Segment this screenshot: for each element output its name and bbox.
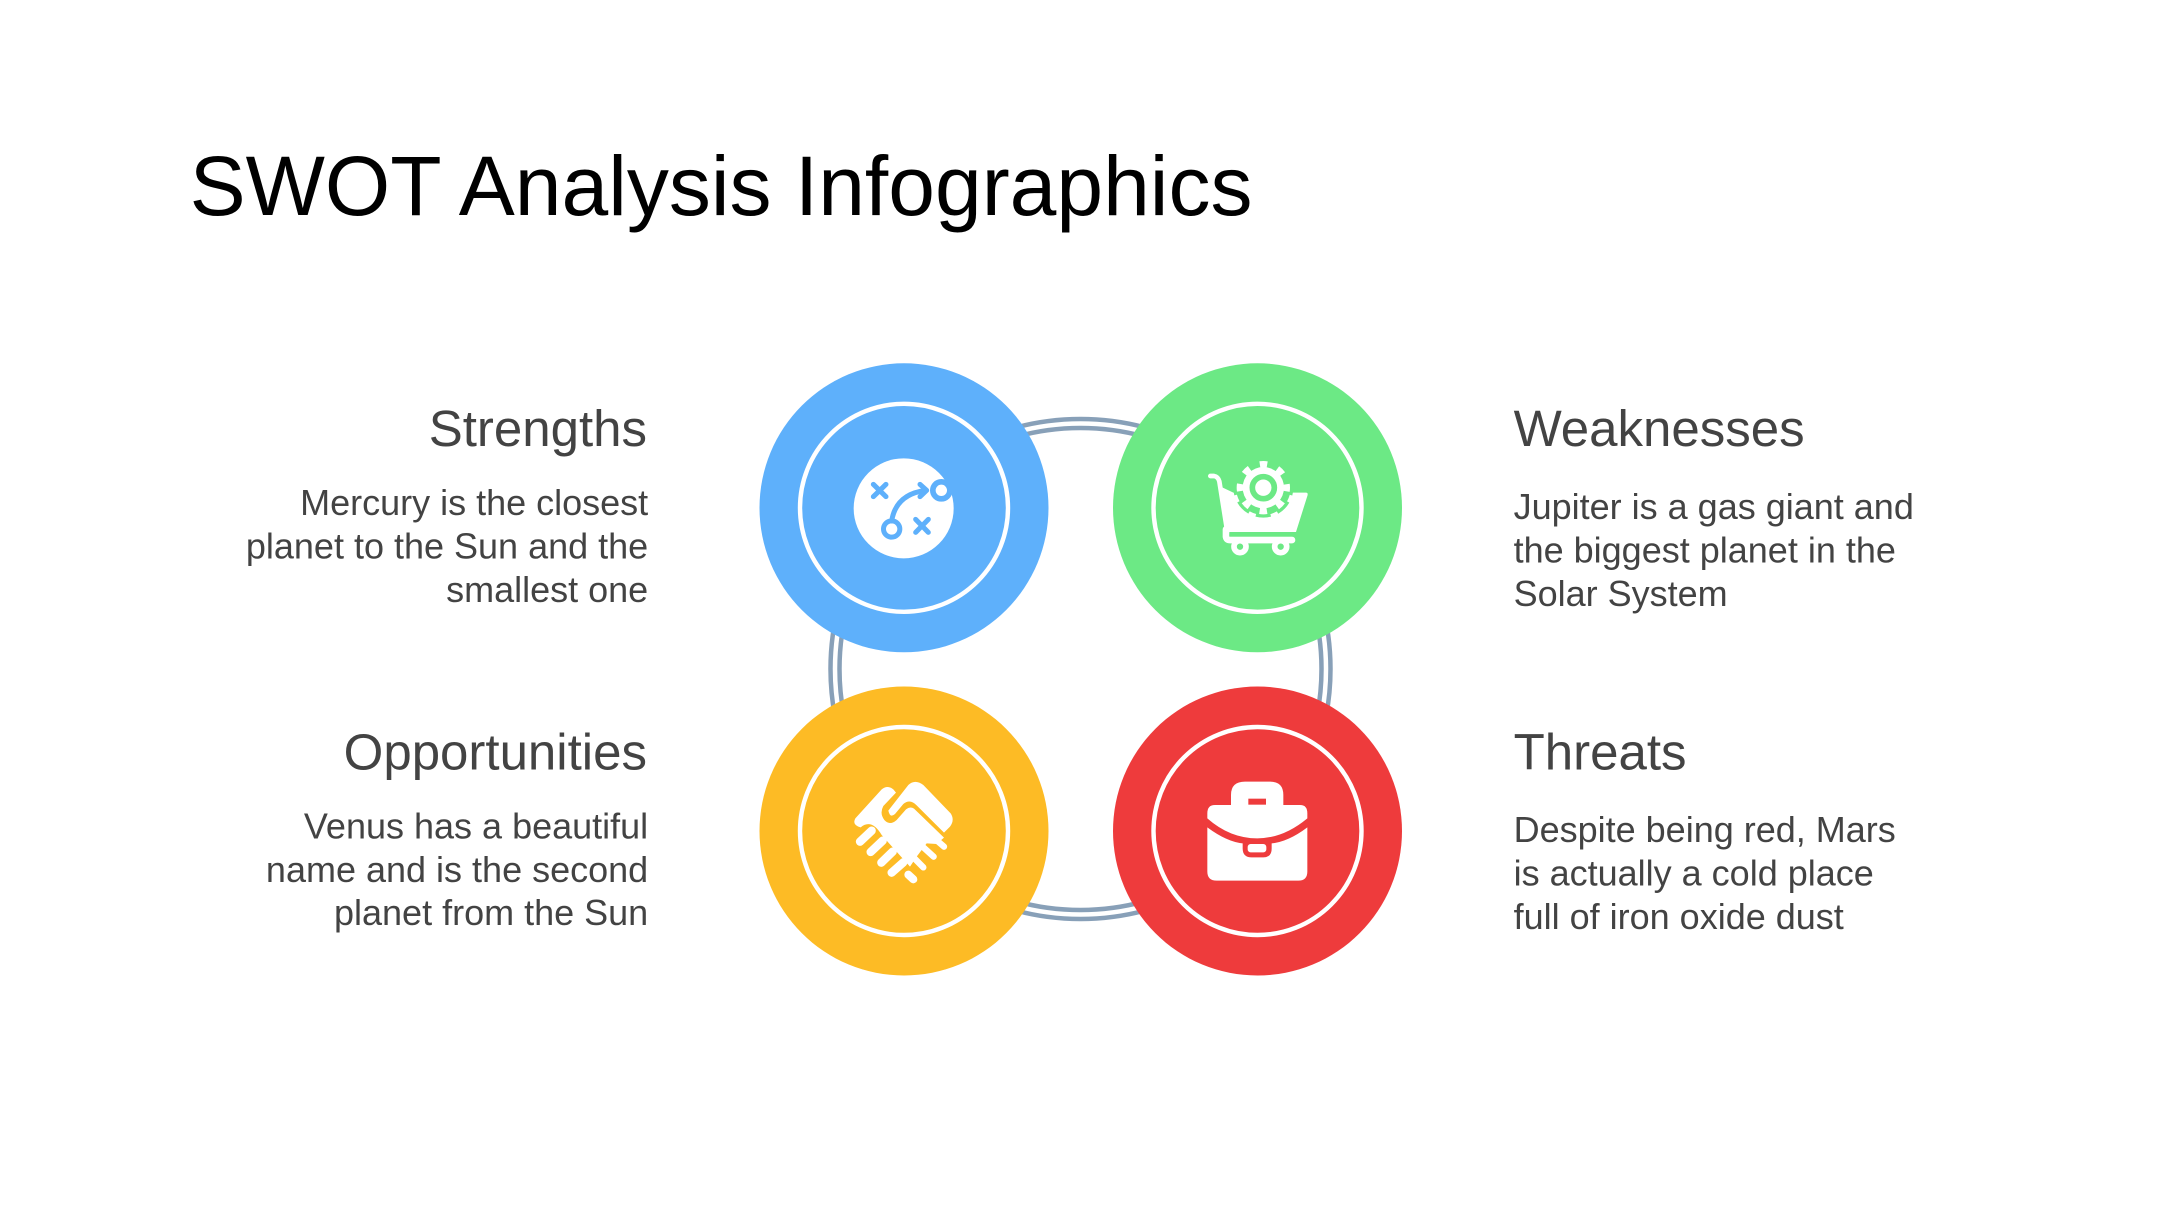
text block: weaknesses description: Jupiter is a gas giant and: [1514, 486, 1914, 527]
text block: threats description: Despite being red, Mars: [1514, 809, 1896, 850]
panel: strengths text: [246, 400, 648, 610]
icon: cart with gear: [1210, 460, 1308, 553]
icon: briefcase: [1207, 782, 1307, 881]
text block: threats description: full of iron oxide dust: [1514, 896, 1844, 937]
text block: weaknesses description: the biggest planet in the: [1514, 530, 1896, 571]
text block: strengths description: Mercury is the closest: [300, 482, 648, 523]
text block: opportunities description: name and is the second: [266, 849, 648, 890]
panel: threats circle: [1113, 686, 1402, 976]
panel: weaknesses text: [1514, 400, 1914, 614]
text block: weaknesses description: [1514, 486, 1914, 614]
text block: strengths description: planet to the Sun and the: [246, 526, 648, 567]
text block: strengths description: smallest one: [446, 569, 648, 610]
connecting double ring: [830, 419, 1330, 919]
text block: weaknesses description: Solar System: [1514, 573, 1728, 614]
heading: strengths: Strengths: [429, 400, 647, 457]
panel: weaknesses circle: [1113, 363, 1402, 652]
text block: opportunities description: planet from the Sun: [334, 892, 648, 933]
text block: threats description: [1514, 809, 1896, 937]
heading: opportunities: Opportunities: [344, 723, 647, 780]
title: SWOT Analysis Infographics: [190, 139, 1252, 233]
panel: threats text: [1514, 723, 1896, 937]
panel: opportunities circle: [760, 686, 1048, 976]
icon: strategy play: [854, 458, 954, 558]
icon: handshake: [854, 782, 953, 879]
text block: threats description: is actually a cold place: [1514, 852, 1874, 894]
text block: strengths description: [246, 482, 648, 610]
heading: threats: Threats: [1514, 723, 1687, 780]
text block: opportunities description: [266, 806, 648, 933]
panel: opportunities text: [266, 723, 648, 933]
text block: opportunities description: Venus has a beautiful: [304, 806, 648, 846]
heading: weaknesses: Weaknesses: [1514, 400, 1805, 457]
panel: strengths circle: [760, 363, 1048, 652]
